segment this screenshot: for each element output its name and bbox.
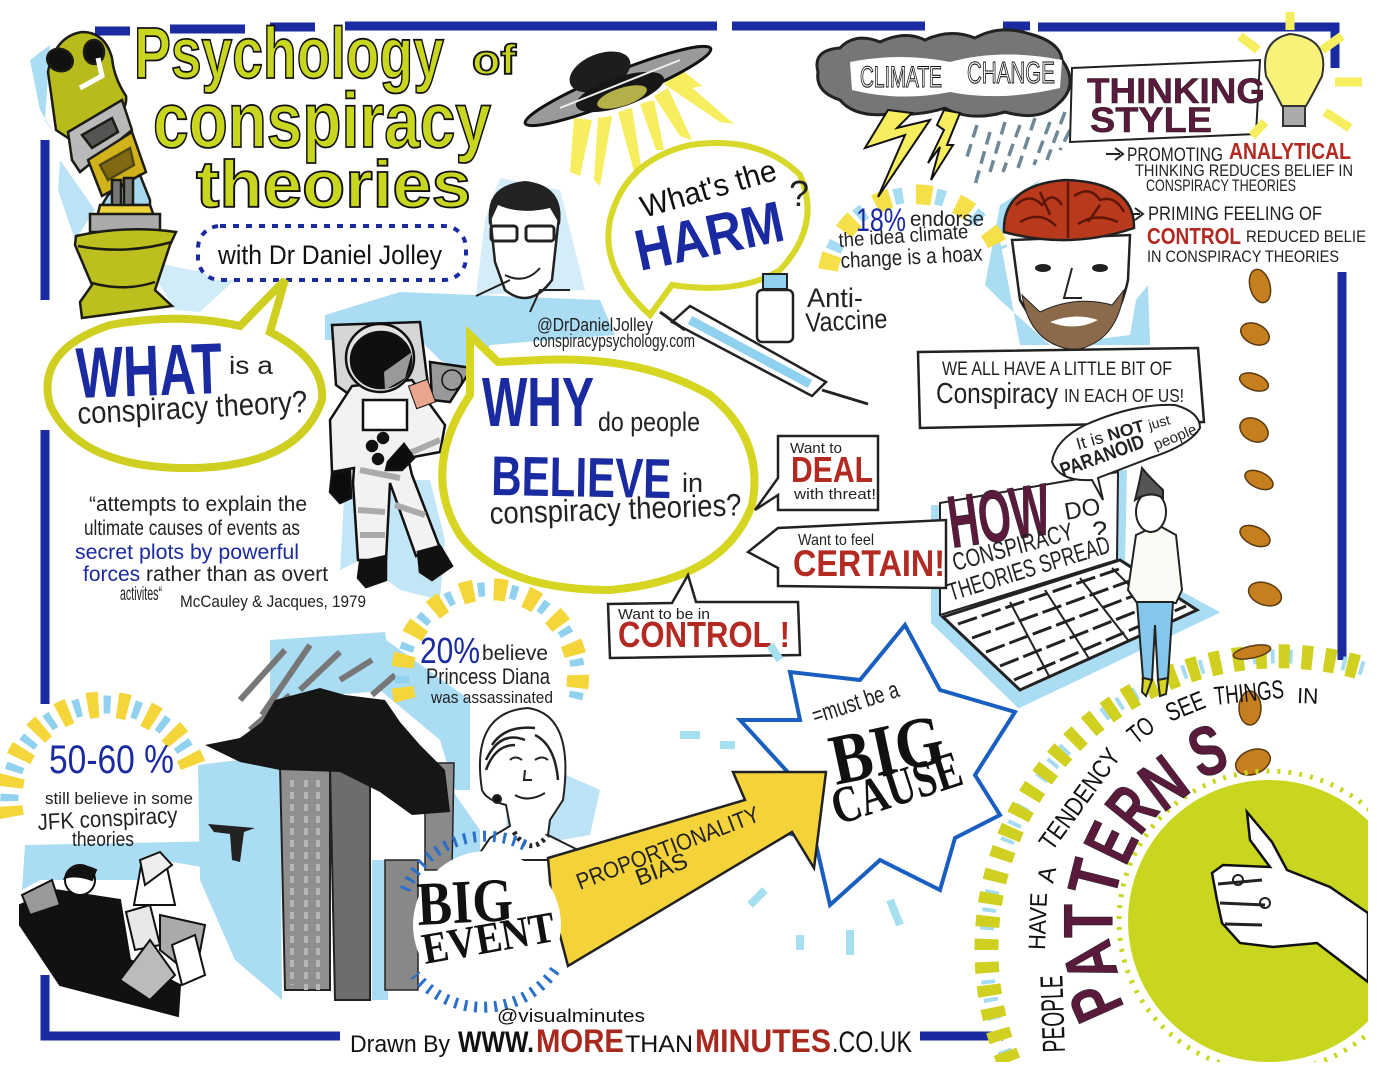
heading bubble: what's the harm: HARM (629, 189, 789, 284)
text: handles (533, 315, 695, 351)
patterns text: E (1069, 811, 1153, 874)
title: Psychology (134, 14, 444, 94)
quote text: activites“ (120, 584, 162, 605)
patterns text: SEE (1161, 685, 1209, 728)
callout: we all have a little bit (918, 348, 1204, 428)
bubble: what is a conspiracy theory: is a (229, 352, 273, 380)
heading: how do conspiracy theories spread (laptop screen): THEORIES SPREAD (945, 531, 1113, 607)
text: anti-vaccine (805, 283, 888, 338)
credit line: Drawn By (350, 1031, 450, 1058)
stat: princess diana: Princess Diana (426, 664, 551, 689)
bubble: why do people believe: conspiracy theories? (489, 487, 742, 531)
icon: syringe and vial (660, 274, 868, 404)
patterns text: PEOPLE (1033, 975, 1072, 1053)
stat: princess diana: believe (482, 642, 548, 665)
text: anti-vaccine: Vaccine (805, 304, 888, 338)
bubble: what is a conspiracy theory (48, 280, 322, 468)
patterns text: R (1091, 771, 1173, 846)
heading: how do conspiracy theories spread (laptop screen): DO (1062, 493, 1102, 526)
icon: flying saucer rays (570, 62, 734, 186)
text: handles: @DrDanielJolley (537, 315, 653, 335)
icon: bearded man with brain (1004, 180, 1134, 350)
title (134, 14, 517, 221)
stat: 50-60 percent JFK (37, 738, 193, 851)
title: theories (196, 147, 471, 221)
callout: deal with threat: Want to (790, 440, 842, 457)
stat: 18 percent climate hoax: the idea climate (838, 221, 969, 252)
text: handles: conspiracypsychology.com (533, 331, 695, 351)
big event burst: EVENT (418, 902, 559, 974)
credit line (350, 1006, 912, 1059)
patterns text: T (1053, 852, 1137, 904)
callout: certain: CERTAIN! (793, 543, 945, 584)
bubble: what is a conspiracy theory: conspiracy theory? (77, 384, 308, 431)
text: thinking style notes: ANALYTICAL (1229, 138, 1351, 164)
text: thinking style notes: PROMOTING (1127, 145, 1223, 166)
patterns text: THINGS (1212, 674, 1285, 711)
heading bubble: what's the harm: What's the (636, 152, 781, 225)
credit line: MINUTES (695, 1023, 831, 1059)
bubble: why do people believe: WHY (482, 363, 594, 441)
patterns text (1024, 674, 1319, 1053)
stat: princess diana: was assassinated (430, 688, 553, 707)
credit line: WWW. (458, 1026, 534, 1059)
stat: princess diana (420, 630, 553, 707)
quote text (75, 493, 366, 611)
patterns text: S (1178, 708, 1237, 793)
heading: how do conspiracy theories spread (laptop screen): CONSPIRACY (949, 518, 1077, 577)
rays: patterns band (986, 656, 1368, 1062)
subtitle box: with Dr Daniel Jolley (217, 240, 442, 270)
bubble: why do people believe: BELIEVE (491, 444, 672, 510)
credit line: THAN (625, 1031, 693, 1058)
text: thinking style notes: IN CONSPIRACY THEORIES (1147, 247, 1339, 266)
big event burst: BIG (415, 866, 515, 939)
callout: deal with threat (755, 436, 878, 510)
heading: how do conspiracy theories spread (laptop screen): ? (1092, 516, 1107, 546)
text: thinking style notes: PRIMING FEELING OF (1148, 204, 1322, 225)
big cause burst (740, 625, 1015, 905)
stat: 50-60 percent JFK: JFK conspiracy (37, 802, 179, 835)
big cause burst: BIG (823, 699, 951, 801)
bubble: why do people believe: do people (598, 407, 700, 437)
icon: Diana portrait (475, 708, 578, 860)
patterns text: IN (1297, 683, 1319, 709)
icon: falling coins (1232, 267, 1285, 780)
quote text: McCauley & Jacques, 1979 (180, 592, 366, 611)
credit line: @visualminutes (497, 1006, 645, 1026)
icon: JFK motorcade (20, 852, 205, 1016)
icon: plane (208, 824, 255, 862)
decorative sun and hand: patterns (1119, 771, 1379, 1071)
rays: 20 percent (402, 589, 578, 700)
icon: alien in jar (44, 32, 176, 318)
quote text: secret plots by powerful (75, 541, 299, 564)
stat: 50-60 percent JFK: still believe in some (45, 789, 193, 808)
callout: certain (748, 520, 946, 588)
icon: storm cloud with climate change (817, 30, 1070, 197)
arrow: proportionality bias: PROPORTIONALITY (572, 801, 763, 895)
patterns text: TO (1121, 710, 1160, 750)
bubble: not paranoid: PARANOID (1057, 431, 1147, 482)
subtitle box (198, 226, 466, 280)
heading bubble: what's the harm: ? (789, 173, 809, 214)
text: thinking style notes (1106, 138, 1366, 266)
patterns text: A (1047, 933, 1133, 990)
patterns text: A (1032, 864, 1062, 885)
heading: how do conspiracy theories spread (laptop screen) (940, 467, 1118, 615)
stat: 18 percent climate hoax: endorse (910, 208, 984, 231)
icon: Daniel Jolley portrait (476, 181, 570, 312)
callout: we all have a little bit: IN EACH OF US! (1064, 386, 1184, 406)
icon: astronaut (330, 322, 472, 587)
callout: certain: Want to feel (798, 532, 874, 549)
text: thinking style notes: REDUCED BELIE (1246, 227, 1366, 246)
quote text: forces rather than as overt (83, 563, 328, 586)
stat: 50-60 percent JFK: 50-60 % (49, 738, 174, 782)
credit line: .CO.UK (832, 1026, 912, 1059)
arrow: proportionality bias: BIAS (631, 847, 691, 891)
arrow: proportionality bias (548, 772, 826, 966)
bubble: why do people believe: in (682, 468, 703, 498)
bubble: not paranoid: just (1145, 411, 1172, 433)
text: thinking style notes: CONTROL (1147, 223, 1241, 249)
icon: storm cloud with climate change: CLIMATE (860, 61, 942, 94)
callout: control: CONTROL ! (618, 614, 790, 655)
bubble: not paranoid (1052, 405, 1200, 500)
callout: we all have a little bit: WE ALL HAVE A LITTLE BIT OF (942, 359, 1172, 380)
stat: 50-60 percent JFK: theories (72, 829, 134, 851)
icon: laptop keyboard (943, 560, 1197, 690)
bubble: not paranoid: It is NOT (1074, 416, 1147, 454)
quote text: “attempts to explain the (89, 493, 307, 516)
heading: thinking style: THINKING (1087, 72, 1265, 111)
rays: 18 percent (828, 194, 1000, 270)
callout: control: Want to be in (618, 606, 710, 623)
laptop blue halo (938, 470, 1205, 700)
bubble: why do people believe (442, 335, 754, 590)
icon: storm cloud with climate change: CHANGE (967, 55, 1055, 90)
patterns text: HAVE (1024, 892, 1053, 950)
patterns text: P (1053, 970, 1138, 1033)
text: anti-vaccine: Anti- (807, 283, 863, 313)
patterns text: T (1049, 904, 1127, 938)
heading bubble: what's the harm (608, 143, 809, 315)
heading: thinking style (1070, 60, 1265, 142)
callout: control (608, 575, 800, 658)
icon: flying saucer (520, 36, 716, 136)
stat: 18 percent climate hoax: change is a hoax (840, 241, 983, 273)
patterns text: TENDENCY (1033, 742, 1126, 856)
title: of (472, 36, 517, 83)
icon: light bulb (1240, 12, 1362, 136)
big cause burst: =must be a (809, 676, 903, 730)
heading: how do conspiracy theories spread (laptop screen): HOW (943, 467, 1055, 564)
big cause burst: CAUSE (824, 741, 969, 836)
big event burst (405, 836, 561, 1007)
bubble: not paranoid: people (1151, 421, 1199, 454)
title: conspiracy (153, 76, 491, 164)
icon: twin towers with smoke (205, 645, 454, 1000)
callout: deal with threat: with threat! (793, 486, 876, 503)
decorative pale blue dashes around burst (680, 645, 900, 955)
text: thinking style notes: CONSPIRACY THEORIES (1146, 176, 1296, 195)
pale blue washes (22, 45, 1150, 1000)
callout: deal with threat: DEAL (791, 449, 873, 490)
stat: 18 percent climate hoax (838, 202, 984, 273)
stat rays: 50-60 (9, 704, 194, 817)
credit line: MORE (536, 1023, 624, 1059)
stat: 18 percent climate hoax: 18% (856, 202, 906, 238)
stat: princess diana: 20% (420, 630, 480, 671)
heading: thinking style: STYLE (1090, 101, 1212, 140)
quote text: ultimate causes of events as (84, 517, 300, 540)
bubble: what is a conspiracy theory: WHAT (75, 329, 223, 414)
icon: man with beanie (1128, 468, 1182, 696)
callout: we all have a little bit: Conspiracy (936, 378, 1058, 410)
patterns text: N (1125, 740, 1202, 825)
